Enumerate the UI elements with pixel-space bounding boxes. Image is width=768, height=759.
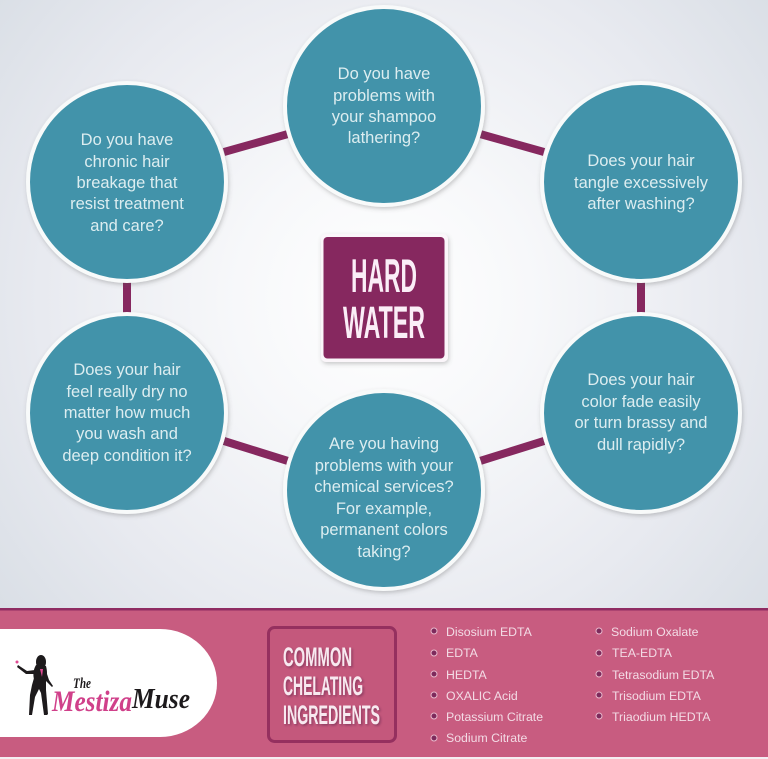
bottom band (0, 608, 768, 759)
circle: dry hair (28, 314, 226, 512)
circle: shampoo lathering: lathering? (348, 129, 420, 147)
ingredient list: column 1 (431, 625, 543, 745)
circle: dry hair: deep condition it? (62, 447, 192, 465)
circle: tangle: tangle excessively (574, 174, 709, 192)
circle: chemical services: chemical services? (314, 478, 454, 496)
circle: tangle: Does your hair (587, 152, 695, 170)
logo text: Mestiza: Mestiza (51, 685, 132, 718)
circle: shampoo lathering: Do you have (338, 65, 430, 83)
circle: chemical services: problems with your (315, 457, 454, 475)
ingredient list: column 1: EDTA (446, 646, 479, 660)
circle: chronic breakage: Do you have (81, 131, 173, 149)
circle: chemical services: Are you having (329, 435, 439, 453)
circle: color fade: Does your hair (587, 371, 695, 389)
connectors: purple links between circles (127, 134, 641, 461)
logo text: Muse: Muse (131, 684, 190, 715)
circle: dry hair: Does your hair (73, 361, 181, 379)
circle: dry hair: you wash and (76, 425, 178, 443)
circle: chronic breakage: and care? (90, 217, 164, 235)
circle: tangle (542, 83, 740, 281)
circle: chronic breakage (28, 83, 226, 281)
icon: woman silhouette (17, 655, 53, 715)
circle: tangle: after washing? (587, 195, 695, 213)
center box: hard water: WATER (343, 297, 425, 348)
logo: The Mestiza Muse (16, 655, 190, 718)
logo pill (0, 629, 217, 737)
circle: dry hair: feel really dry no (66, 383, 188, 401)
ingredient list: column 1: Sodium Citrate (446, 731, 527, 745)
ingredient list: column 2: Sodium Oxalate (611, 625, 699, 639)
ingredient list: column 2: Triaodium HEDTA (612, 710, 711, 724)
circle: color fade: dull rapidly? (597, 436, 685, 454)
heading box: common chelating ingredients: INGREDIENTS (283, 700, 380, 730)
ingredient list: column 2 (596, 625, 715, 724)
ingredient list: column 1: OXALIC Acid (446, 689, 518, 703)
circle: dry hair: matter how much (64, 404, 190, 422)
circle: chronic breakage: resist treatment (70, 195, 184, 213)
circle: shampoo lathering: problems with (333, 87, 435, 105)
heading box: common chelating ingredients: CHELATING (283, 671, 363, 701)
circle: color fade (542, 314, 740, 512)
circle: chemical services: permanent colors (320, 521, 448, 539)
ingredient list: column 1: Disosium EDTA (446, 625, 533, 639)
circle: chronic breakage: breakage that (77, 174, 178, 192)
center box: hard water (321, 234, 448, 362)
circle: color fade: color fade easily (581, 393, 701, 411)
circle: shampoo lathering: your shampoo (332, 108, 436, 126)
ingredient list: column 1: HEDTA (446, 668, 488, 682)
circle: shampoo lathering (285, 7, 483, 205)
ingredient list: column 2: Trisodium EDTA (612, 689, 702, 703)
heading box: common chelating ingredients (268, 628, 396, 742)
circle: chemical services: taking? (357, 543, 411, 561)
heading box: common chelating ingredients: COMMON (283, 642, 352, 672)
ingredient list: column 1: Potassium Citrate (446, 710, 543, 724)
circle: chronic breakage: chronic hair (84, 153, 170, 171)
ingredient list: column 2: TEA-EDTA (612, 646, 673, 660)
circle: chemical services: For example, (336, 500, 432, 518)
logo text: The: The (73, 676, 91, 692)
ingredient list: column 2: Tetrasodium EDTA (612, 668, 715, 682)
center box: hard water: HARD (351, 249, 417, 302)
circle: chemical services (285, 391, 483, 589)
circle: color fade: or turn brassy and (575, 414, 707, 432)
